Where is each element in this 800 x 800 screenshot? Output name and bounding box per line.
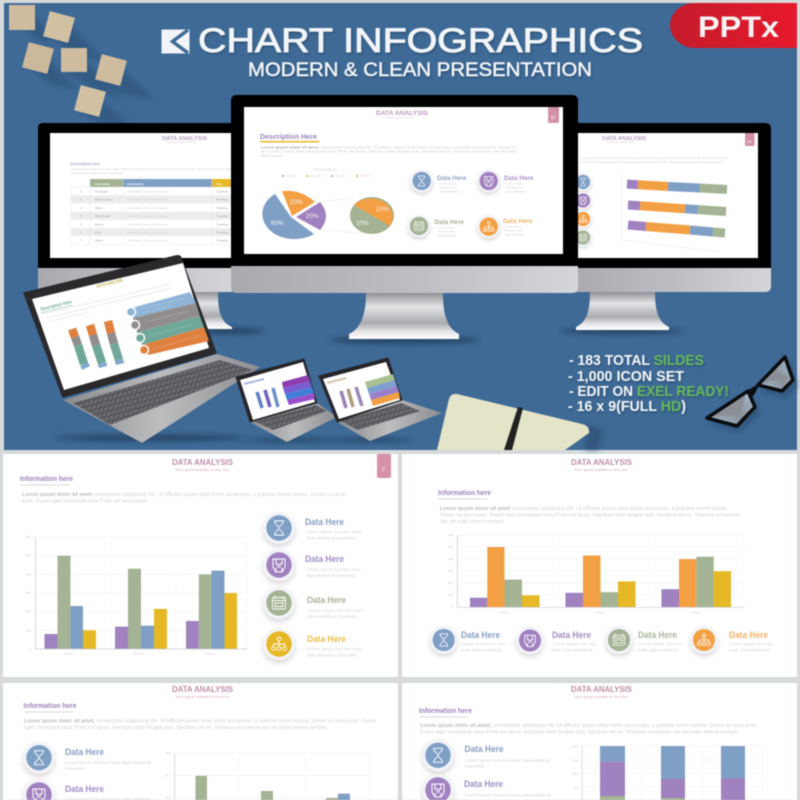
slide subtitle: Your great subtitle in this line [574, 695, 628, 699]
slide: cylinders and ribbons: DATA ANALYSIS [96, 277, 124, 290]
panel: left icons with bar chart [3, 683, 398, 800]
slide: pie chart: has two main [505, 228, 523, 232]
slide: pie chart: 4th Qtr [360, 174, 371, 178]
slide: data table: Trending [216, 198, 228, 202]
bar chart: Group 3 [690, 610, 701, 614]
icon: cup [23, 779, 55, 800]
intro text [21, 492, 345, 504]
slide: data table: Trending [216, 239, 228, 243]
data labels: data statistical important. [308, 614, 358, 619]
slide: 3D stacked bars: consectetur adipiscing elit. Ut efficitur ipsum vitae tortor accumsan, a pulvinar lorem lacinia. Donec eu arcu [579, 156, 728, 160]
slide: data table: Cars [95, 230, 102, 234]
slide subtitle: Your great subtitle in this line [175, 695, 229, 699]
slide: 3D stacked bars [574, 133, 754, 252]
slide: data table: Trending [216, 206, 228, 210]
laptop: small multicolour [319, 358, 442, 442]
bar chart: Group 2 [594, 610, 605, 614]
slide: pie chart: Information [313, 167, 337, 173]
data labels: Data Here [307, 595, 346, 605]
intro text [24, 718, 376, 731]
bar chart: 500 [26, 554, 31, 558]
slide: data table [70, 136, 233, 244]
data labels: Data Here [552, 630, 591, 640]
data labels: Data Here [464, 779, 503, 789]
page tab [377, 454, 391, 478]
bar chart [26, 535, 247, 656]
intro text: Donec eu arcu justo. Fusce eget consequat risus Proin est lacus, interdum vitae feugiat quis, faucibus vel mi. Vivamus accumsan [440, 512, 740, 518]
data labels: data statistical important. [306, 573, 357, 578]
slide: pie chart: 1st Qtr [286, 174, 297, 178]
intro text: Lorem ipsum dolor sit amet, consectetur adipiscing elit. Ut efficitur ipsum vitae tortor accumsan, a pulvinar lorem lacinia. Donec eu arcu justo. Fusce [24, 718, 376, 724]
slide: data table: Game [95, 239, 104, 243]
slide: data table: 1 [80, 190, 82, 194]
bar chart: Group 1 [64, 652, 75, 656]
slide: pie chart: data statistical [437, 234, 456, 238]
slide: data table: Trending [216, 222, 228, 226]
section heading: Information here [20, 474, 73, 483]
wooden blocks [9, 5, 155, 125]
bar chart: 600 [165, 751, 170, 755]
slide: data table: 6 [80, 230, 82, 234]
section heading: Information here [24, 701, 76, 710]
notebook [437, 394, 604, 450]
bar chart: 100 [448, 593, 453, 597]
slide: data table: Information here in this column [127, 190, 168, 194]
slide: pie chart: DATA ANALYSIS [376, 110, 429, 117]
slide: data table: Trending [216, 230, 228, 234]
icon: hourglass [23, 742, 55, 774]
data labels: Lorem Ipsum has two main data statistical [65, 760, 151, 765]
monitor: right [560, 123, 771, 334]
slide heading: DATA ANALYSIS [571, 457, 632, 467]
data labels: Lorem Ipsum has two [461, 642, 505, 646]
monitor: left [38, 123, 265, 334]
data labels: main data statistical [638, 648, 678, 652]
slide: pie chart: Lorem Ipsum [440, 182, 458, 186]
slide: pie chart: Lorem Ipsum [505, 224, 523, 228]
data labels: Data Here [305, 517, 344, 527]
icon: hourglass [430, 626, 458, 654]
slide: data table: Information here in this column [127, 206, 168, 210]
slide: data table: Mobile phone [95, 198, 113, 202]
intro text: justo. Fusce eget consequat risus Proin est lacus,imper. [21, 498, 149, 504]
icon: hourglass [422, 739, 454, 771]
data labels: Data Here [307, 634, 346, 644]
slide: data table: 5 [80, 222, 82, 226]
stacked bar chart: 70% [573, 786, 579, 790]
data labels: Lorem Ipsum has two main [308, 608, 363, 613]
data labels: important. [65, 766, 85, 771]
monitor: centre [231, 95, 578, 344]
slide: data table: Item Name [95, 182, 111, 186]
slide: pie chart: viverra semper. [261, 154, 284, 158]
slide: 3D stacked bars: Your great subtitle in this line [606, 141, 637, 144]
slide: pie chart: Data Here [437, 175, 467, 182]
slide: pie chart: data statistical [505, 232, 524, 236]
data labels [461, 630, 773, 652]
feature: excel: - EDIT ON EXEL READY! [569, 383, 729, 400]
slide: pie chart: arcu justo. Fusce eget consequat risus Proin est lacus, interdum vitae feugiat quis, faucibus vel mi. Vivamus accumsan nisi vel nulla [261, 150, 516, 154]
page tab: 2 [382, 467, 385, 473]
title [162, 22, 643, 81]
slide: data table: important Data analysis which summarizes [70, 171, 124, 175]
icon: hierarchy [690, 626, 718, 654]
slide subtitle: Your great subtitle in this line [175, 468, 229, 472]
slide: data table: Trending [216, 214, 228, 218]
slide: data table: Information here in this column [127, 230, 168, 234]
slide: pie chart: 10% [376, 206, 389, 213]
slide: data table: Information here in this column [127, 198, 168, 202]
intro text [440, 506, 740, 525]
bar chart: Group 2 [134, 652, 145, 656]
data labels: main data statistical [552, 648, 592, 652]
slide: pie chart: 20% [290, 199, 303, 206]
slide: pie chart: has two main [440, 186, 458, 190]
stacked bar chart: 100% [571, 744, 579, 748]
slide: data table: Information here in this column [127, 214, 168, 218]
glasses [707, 357, 798, 433]
slide heading: DATA ANALYSIS [571, 684, 632, 694]
slide: pie chart: Data Here [503, 218, 533, 225]
slide: data table: Shirts [95, 206, 103, 210]
slide: pie chart: Lorem ipsum dolor sit amet, consectetur adipiscing elit. Ut efficitur ipsum vitae tortor accumsan, a pulvinar lorem lacinia. Donec eu [261, 146, 517, 150]
data labels: important. [465, 764, 485, 768]
heading: chart infographics: CHART INFOGRAPHICS [198, 22, 643, 60]
slide: pie chart: 10% [356, 220, 369, 227]
bar chart: 100 [26, 628, 31, 632]
panel: chart with right icons [3, 454, 398, 677]
bar chart [448, 533, 744, 614]
subheading: MODERN & CLEAN PRESENTATION [248, 60, 592, 81]
slide: pie chart: data statistical [506, 190, 525, 194]
slide: data table: 7 [80, 239, 82, 243]
data labels: main data statistical [461, 648, 501, 652]
data labels: Data Here [65, 747, 104, 757]
slide: data table: DATA ANALYSIS [162, 136, 207, 142]
slide: 3D stacked bars: 44 [747, 139, 752, 144]
data labels: data statistical important. [306, 536, 357, 540]
bar chart: 500 [165, 774, 170, 778]
data labels: Data Here [461, 630, 500, 640]
slide heading: DATA ANALYSIS [172, 684, 233, 694]
data labels: Lorem Ipsum has two main [306, 567, 362, 572]
data labels [464, 744, 551, 798]
laptop: small purple [236, 359, 337, 442]
panel: chart with bottom icons [402, 454, 797, 677]
data labels: Lorem Ipsum has two [552, 642, 596, 646]
intro text: Lorem ipsum dolor sit amet consectetur adipiscing elit. Ut efficitur ipsum vitae tortor accumsan, a pulvinar lorem lacinia. Donec eu arcu [22, 492, 345, 498]
intro text: Lorem ipsum dolor sit amet, consectetur adipiscing elit. Ut efficitur ipsum vitae tortor accumsan, a pulvinar lorem lacinia. Donec eu arcu justo. [420, 723, 758, 729]
bar chart: 400 [165, 796, 170, 800]
feature list [568, 352, 729, 415]
slide: pie chart: 57 [551, 115, 557, 120]
slide subtitle: Your great subtitle in this line [574, 468, 628, 472]
bar chart: 300 [448, 569, 453, 573]
slide: data table: Computer [95, 190, 108, 194]
bar chart: 400 [448, 557, 453, 561]
bar chart: 200 [26, 610, 31, 614]
data labels: Lorem Ipsum has two main data statistical [465, 758, 551, 763]
data labels: Data Here [305, 554, 344, 564]
data labels: Lorem Ipsum has two main data statistical [465, 792, 551, 798]
slide: data table: Information here in this column [127, 239, 168, 243]
slide: data table: 4 [80, 214, 82, 218]
icon: cup [422, 774, 454, 800]
data labels: Data Here [464, 744, 504, 754]
slide: 3D stacked bars: risus Proin est lacus, interdum vitae feugiat quis, faucibus vel mi. Vivamus accumsan nisi vel nulla viverra [579, 160, 723, 164]
feature: resolution: - 16 x 9(FULL HD) [568, 398, 686, 415]
slide: purple ribbons [244, 375, 315, 408]
bar chart: 200 [448, 581, 453, 585]
slide: 3D stacked bars: DATA ANALYSIS [602, 136, 646, 142]
intro text: Fusce eget consequat risus Proin est lacus, interdum vitae feugiat quis, faucibus vel mi. Vivamus accumsan nisi vel nulla viverra semper. [420, 730, 739, 736]
icon: hierarchy [263, 628, 295, 660]
section heading: Information here [438, 488, 491, 497]
bar chart: 400 [26, 572, 31, 576]
bar chart: 0 [30, 647, 32, 651]
icon: logo mark [162, 30, 190, 54]
bar chart [165, 751, 370, 800]
data labels: Lorem Ipsum has two main [307, 646, 363, 652]
slide: pie chart [260, 107, 559, 239]
badge: PPTx: PPTx [698, 11, 780, 44]
data labels [65, 747, 151, 800]
intro text [420, 723, 758, 736]
bar chart: 0 [452, 605, 454, 609]
feature: total slides: - 183 TOTAL SILDES [569, 352, 704, 369]
panel: left icons with stacked chart [402, 683, 797, 800]
stacked bar chart: 80% [573, 772, 579, 776]
bar chart: 600 [26, 535, 31, 539]
icon: cup [516, 627, 544, 654]
data labels: Data Here [65, 784, 104, 794]
data labels: main data statistical [729, 648, 769, 652]
feature: icon set: - 1,000 ICON SET [568, 368, 684, 385]
slide: cylinders and ribbons [40, 277, 209, 368]
slide: pie chart: has two main [437, 230, 455, 234]
icon: hourglass [263, 512, 295, 544]
data labels: data statistical important. [307, 652, 358, 658]
slide: pie chart: Lorem Ipsum [506, 182, 524, 186]
slide: data table: 3 [80, 206, 82, 210]
slide: data table: Information [127, 182, 144, 186]
slide: data table: Information here in this column [127, 222, 168, 226]
data labels: Data Here [638, 630, 677, 640]
section heading: Information here [419, 706, 472, 715]
panel: hero banner [4, 3, 798, 450]
slide: data table: Books [95, 222, 104, 226]
slide: pie chart: Lorem Ipsum [437, 226, 455, 230]
data labels: Lorem Ipsum has two [638, 642, 682, 646]
slide: data table: 2 [80, 198, 82, 202]
bar chart: 300 [26, 591, 31, 595]
bar chart: 600 [448, 533, 453, 537]
data labels: Data Here [729, 630, 768, 640]
icon: calendar [605, 626, 633, 654]
slide: pie chart: 2nd Qtr [310, 174, 322, 178]
slide: pie chart: Your great subtitle in this line [381, 116, 415, 120]
slide: pie chart: Data Here [434, 219, 464, 226]
badge: PPTx [670, 3, 797, 48]
slide: pie chart: Description Here [260, 132, 317, 141]
slide: pie chart: 20% [306, 213, 319, 220]
intro text: eget consequat risus Proin est lacus, interdum vitae feugiat quis, faucibus vel mi. Vivamus accumsan nisi vel nulla viverra semper. [24, 725, 328, 731]
slide: multicolour ribbons [327, 374, 400, 408]
stacked bar chart: 90% [573, 758, 579, 762]
intro text: nisi vel nulla viverra semper. [440, 519, 505, 525]
bar chart: Group 3 [205, 652, 216, 656]
slide: data table: Trending [216, 190, 228, 194]
intro text: Lorem ipsum dolor sit amet consectetur adipiscing elit. Ut efficitur ipsum vitae tortor accumsan, a pulvinar lorem lacinia. [440, 506, 728, 512]
slide: data table: Description here [70, 162, 100, 166]
slide: data table: Title [216, 182, 222, 186]
slide: data table: Your great subtitle in this line [166, 141, 197, 144]
slide: cylinders and ribbons: Description Here [40, 299, 73, 313]
icon: calendar [263, 587, 295, 619]
slide heading: DATA ANALYSIS [172, 457, 233, 467]
stacked bar chart [571, 744, 763, 800]
slide: pie chart: Data Here [504, 175, 534, 182]
slide: data table: Lorem Ipsum has two main data statistical methodologies important Data analysis which summarizes data [70, 167, 233, 171]
data labels: Lorem Ipsum has two main [306, 530, 362, 534]
icon: cup [263, 549, 295, 581]
data labels [305, 517, 363, 658]
slide: pie chart: has two main [506, 186, 524, 190]
slide: data table: Real Estate [95, 214, 111, 218]
data labels: Lorem Ipsum has two [729, 642, 773, 646]
laptop: large [24, 256, 260, 443]
bar chart: Group 1 [498, 610, 509, 614]
slide: pie chart: data statistical [440, 190, 459, 194]
bar chart: 500 [448, 545, 453, 549]
slide: pie chart: 3rd Qtr [335, 174, 346, 178]
slide: pie chart: 60% [271, 220, 284, 227]
